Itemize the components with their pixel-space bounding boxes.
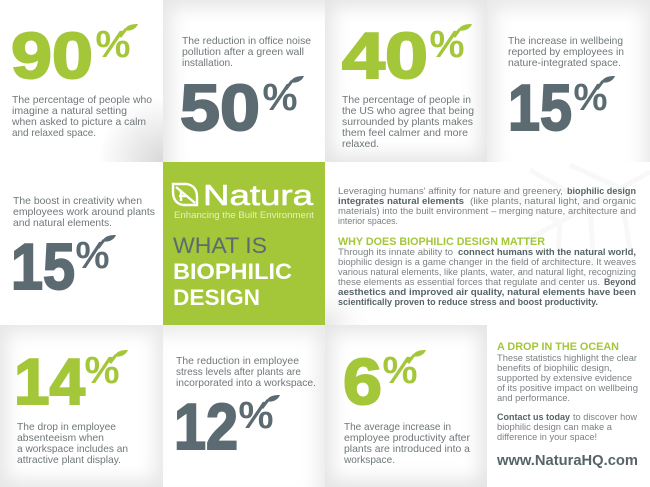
description [182, 36, 311, 69]
description: workspace. [343, 455, 395, 466]
call to action: biophilic design can make a [497, 422, 613, 433]
description: employee productivity after [344, 433, 471, 444]
description [508, 36, 624, 69]
text block: introduction: (like plants, natural light, and organic [470, 196, 636, 207]
stat: 15: 15 [508, 71, 572, 144]
call to action: Contact us today [497, 412, 571, 423]
statistics summary: of its positive impact on wellbeing [497, 383, 638, 394]
description [176, 356, 316, 389]
description: and natural elements. [13, 218, 112, 229]
text block: introduction: materials) into the built environment – merging nature, architecture and [338, 206, 636, 217]
stat: 90: 90 [11, 19, 93, 92]
description: imagine a natural setting [12, 106, 127, 117]
description: attractive plant display. [17, 455, 121, 466]
percent sign with leaf: % [76, 235, 110, 277]
description: The reduction in employee [176, 356, 299, 367]
description: surrounded by plants makes [342, 117, 473, 128]
description: pollution after a green wall [182, 47, 304, 58]
text block: why it matters: aesthetics and improved air quality, natural elements have been [338, 287, 636, 298]
text block: why it matters: these elements as essential forces that regulate and center us. [338, 277, 600, 288]
statistics summary: supported by extensive evidence [497, 373, 632, 384]
description: The average increase in [344, 422, 451, 433]
description [11, 95, 152, 139]
text block: introduction: Leveraging humans' affinity for nature and greenery, [338, 186, 563, 197]
description: and relaxed space. [12, 128, 96, 139]
text block: introduction [338, 186, 636, 227]
panel: 14 percent [14, 345, 128, 466]
icon: Natura leaf logo [173, 184, 197, 205]
description: absenteeism when [17, 433, 104, 444]
description: The increase in wellbeing [508, 36, 623, 47]
title: what is: WHAT IS [173, 233, 267, 258]
title: design: DESIGN [173, 285, 260, 310]
stat: 12: 12 [174, 390, 238, 463]
panel: 12 percent [174, 356, 316, 463]
call to action [497, 412, 637, 443]
description: stress levels after plants are [176, 367, 301, 378]
text block: introduction: biophilic design [567, 186, 636, 197]
panel: 15 percent wellbeing [508, 36, 624, 144]
description: The reduction in office noise [182, 36, 311, 47]
statistics summary: These statistics highlight the clear [497, 353, 638, 364]
percent sign with leaf: % [84, 350, 120, 392]
description [342, 95, 474, 150]
text block: why it matters: Beyond [604, 277, 636, 288]
title: biophilic: BIOPHILIC [173, 259, 292, 284]
description: a workspace includes an [17, 444, 128, 455]
percent sign with leaf: % [574, 77, 608, 119]
statistics summary: and performance. [497, 393, 570, 404]
description: installation. [182, 58, 233, 69]
statistics summary: benefits of biophilic design, [497, 363, 612, 374]
text block: introduction: interior spaces. [338, 216, 398, 227]
stat: 15: 15 [11, 230, 75, 303]
percent sign with leaf: % [96, 24, 130, 66]
call to action: difference in your space! [497, 432, 597, 443]
panel: 40 percent [342, 19, 474, 150]
panel: green title [163, 162, 325, 325]
description: The boost in creativity when [13, 196, 142, 207]
percent sign with leaf: % [430, 24, 464, 66]
text block: why it matters: biophilic design is a game changer in the field of architecture. It weaves [338, 257, 636, 268]
description: the US who agree that being [342, 106, 474, 117]
description: The drop in employee [17, 422, 116, 433]
panel: 90 percent [11, 19, 152, 139]
heading: A DROP IN THE OCEAN [497, 341, 619, 353]
stat: 14: 14 [14, 345, 85, 418]
description [13, 196, 155, 229]
percent sign with leaf: % [238, 395, 274, 437]
website: www.NaturaHQ.com [496, 453, 638, 469]
stat: 40: 40 [342, 19, 428, 92]
description: The percentage of people in [342, 95, 471, 106]
description: reported by employees in [508, 47, 624, 58]
logo wordmark: Natura [203, 180, 314, 212]
decorative palm leaf [500, 165, 650, 310]
description: incorporated into a workspace. [176, 378, 316, 389]
percent sign with leaf: % [262, 77, 298, 119]
percent sign with leaf: % [382, 350, 418, 392]
description [17, 422, 128, 466]
description: nature-integrated space. [508, 58, 621, 69]
description: when asked to picture a calm [11, 117, 146, 128]
text block: why it matters: Through its innate ability to [338, 247, 453, 258]
description: employees work around plants [13, 207, 155, 218]
panel: 15 percent creativity [11, 196, 155, 303]
stat: 50: 50 [180, 71, 260, 144]
call to action: to discover how [573, 412, 637, 423]
panel: 50 percent [180, 36, 311, 144]
panel: 6 percent [343, 345, 471, 466]
statistics summary [497, 353, 638, 404]
text block: why it matters: connect humans with the natural world, [458, 247, 636, 258]
description: plants are introduced into a [344, 444, 470, 455]
heading: why does biophilic design matter: WHY DOES BIOPHILIC DESIGN MATTER [338, 236, 545, 248]
logo tagline: Enhancing the Built Environment [174, 209, 314, 220]
text block: why it matters [338, 247, 636, 308]
text block: why it matters: various natural elements, like plants, water, and natural light, recognizing [338, 267, 636, 278]
description [343, 422, 471, 466]
text block: why it matters: scientifically proven to reduce stress and boost productivity. [338, 297, 598, 308]
description: The percentage of people who [12, 95, 152, 106]
panel: a drop in the ocean [496, 341, 638, 469]
description: relaxed. [342, 139, 379, 150]
stat: 6: 6 [343, 345, 382, 418]
description: them feel calmer and more [342, 128, 468, 139]
text block: introduction: integrates natural elements [338, 196, 464, 207]
